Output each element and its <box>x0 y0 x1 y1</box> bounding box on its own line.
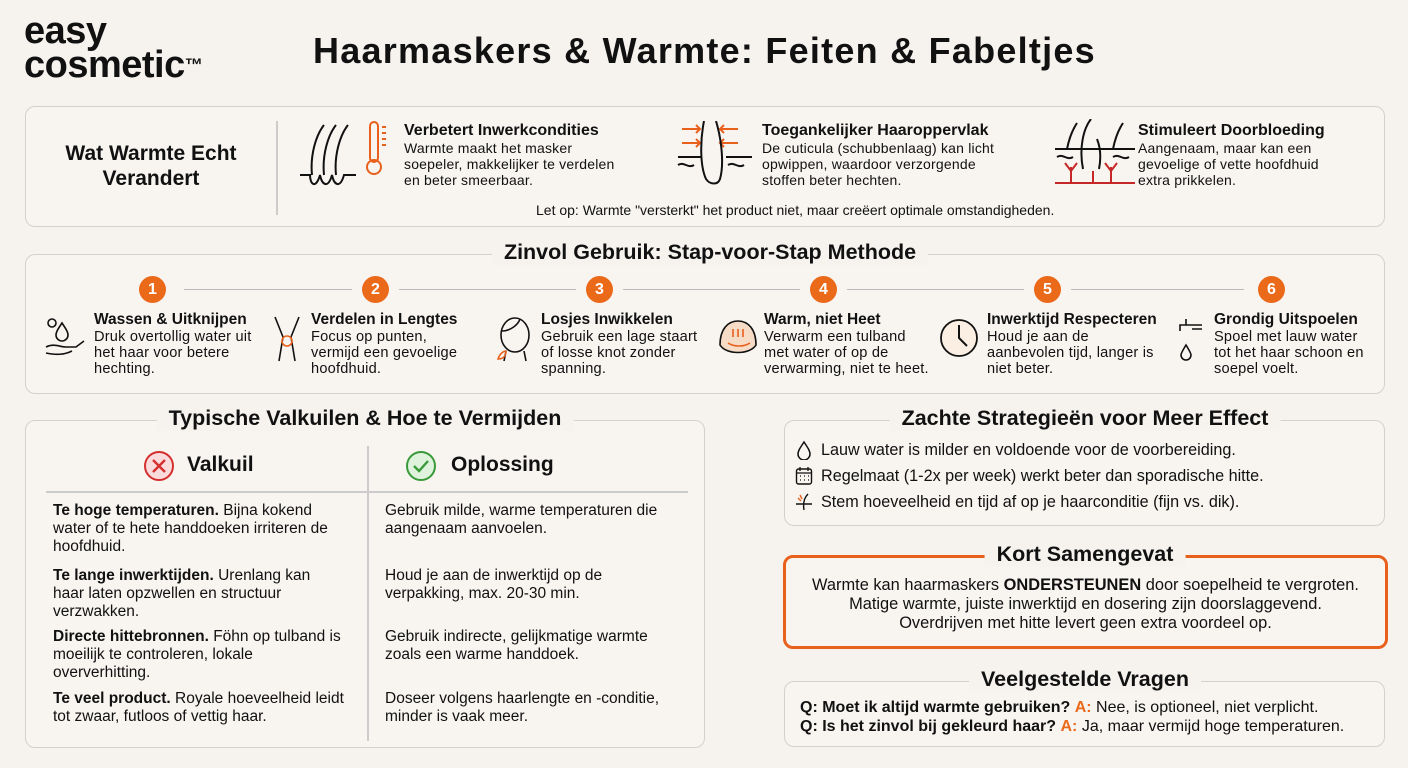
panel: valkuilen: moeilijk te controleren, lokale <box>53 646 253 663</box>
panel: wat warmte echt verandert <box>25 106 1385 227</box>
pitfall rows: water of te hete handdoeken irriteren de <box>53 520 328 537</box>
panel: valkuilen: tot zwaar, futloos of vettig haar. <box>53 708 267 725</box>
step 1: het haar voor betere <box>94 345 229 361</box>
panel: valkuilen: oververhitting. <box>53 664 150 681</box>
pitfall rows: Te hoge temperaturen. Bijna kokend <box>53 502 312 519</box>
panel: valkuilen: verzwakken. <box>53 603 139 620</box>
item 1 <box>404 122 614 188</box>
step 6: soepel voelt. <box>1214 361 1299 377</box>
panel: valkuilen <box>25 420 705 748</box>
summary text: Overdrijven met hitte levert geen extra voordeel op. <box>899 614 1272 632</box>
step 6: tot het haar schoon en <box>1214 345 1364 361</box>
panel: valkuilen: minder is vaak meer. <box>385 708 528 725</box>
step 2: Verdelen in Lengtes <box>311 311 457 328</box>
oplossing header <box>406 451 554 481</box>
heading: zachte strategieen: Zachte Strategieën voor Meer Effect <box>902 406 1268 430</box>
step 2: vermijd een gevoelige <box>311 345 457 361</box>
item 2: Toegankelijker Haaroppervlak <box>762 122 988 139</box>
step 1: hechting. <box>94 361 155 377</box>
valkuil header: Valkuil <box>187 453 254 476</box>
step 4: Verwarm een tulband <box>764 329 906 345</box>
heading: stappen: Zinvol Gebruik: Stap-voor-Stap Methode <box>504 240 916 264</box>
panel: faq <box>784 681 1385 747</box>
panel: valkuilen: Gebruik indirecte, gelijkmatige warmte <box>385 628 648 645</box>
step 5: Houd je aan de <box>987 329 1089 345</box>
step numbers: 6 <box>1267 281 1276 298</box>
step 3 <box>496 311 697 377</box>
heading: Wat Warmte Echt Verandert <box>65 142 237 190</box>
strategy list: Stem hoeveelheid en tijd af op je haarconditie (fijn vs. dik). <box>821 493 1239 511</box>
note: Let op: Warmte "versterkt" het product niet, maar creëert optimale omstandigheden. <box>536 202 1054 218</box>
step numbers: 5 <box>1043 281 1052 298</box>
panel: valkuilen: zoals een warme handdoek. <box>385 646 579 663</box>
panel: valkuilen: haar laten opzwellen en structuur <box>53 585 281 602</box>
icon: hair thermometer <box>300 121 386 186</box>
step 6: Spoel met lauw water <box>1214 329 1358 345</box>
panel: valkuilen: Gebruik milde, warme temperaturen die <box>385 502 657 519</box>
item 2: opwippen, waardoor verzorgende <box>762 156 976 172</box>
panel: valkuilen: Directe hittebronnen. Föhn op tulband is <box>53 628 341 645</box>
faq lines <box>800 699 1344 735</box>
item 3: Stimuleert Doorbloeding <box>1138 122 1325 139</box>
step numbers <box>139 276 1285 303</box>
step 2 <box>274 311 457 377</box>
panel: valkuilen: verpakking, max. 20-30 min. <box>385 585 580 602</box>
step numbers: 1 <box>148 281 157 298</box>
panel: stappen <box>25 254 1385 394</box>
panel: valkuilen: Doseer volgens haarlengte en -conditie, <box>385 690 659 707</box>
valkuil header <box>144 451 254 481</box>
step 4: verwarming, niet te heet. <box>764 361 929 377</box>
step 4: Warm, niet Heet <box>764 311 881 328</box>
item 3 <box>1138 122 1325 188</box>
summary text: Matige warmte, juiste inwerktijd en dosering zijn doorslaggevend. <box>849 595 1322 613</box>
item 1: Warmte maakt het masker <box>404 140 572 156</box>
strategy list <box>821 441 1264 511</box>
strategy list: Regelmaat (1-2x per week) werkt beter dan sporadische hitte. <box>821 467 1264 485</box>
step numbers: 4 <box>819 281 828 298</box>
item 3: Aangenaam, maar kan een <box>1138 140 1312 156</box>
title: Haarmaskers & Warmte: Feiten & Fabeltjes <box>313 30 1096 71</box>
icon: cuticle arrows <box>678 121 752 184</box>
item 2: stoffen beter hechten. <box>762 172 902 188</box>
panel: valkuilen: aangenaam aanvoelen. <box>385 520 547 537</box>
item 2 <box>762 122 994 188</box>
panel: valkuilen: Houd je aan de inwerktijd op de <box>385 567 602 584</box>
item 3: gevoelige of vette hoofdhuid <box>1138 156 1319 172</box>
step 6: Grondig Uitspoelen <box>1214 311 1358 328</box>
oplossing header: Oplossing <box>451 453 554 476</box>
step 3: spanning. <box>541 361 606 377</box>
heading: kort samengevat: Kort Samengevat <box>997 542 1173 566</box>
step 1 <box>46 311 252 377</box>
pitfall rows: hoofdhuid. <box>53 538 125 555</box>
item 2: De cuticula (schubbenlaag) kan licht <box>762 140 994 156</box>
step 3: Losjes Inwikkelen <box>541 311 673 328</box>
item 3: extra prikkelen. <box>1138 172 1236 188</box>
panel: valkuilen: Te lange inwerktijden. Urenlang kan <box>53 567 310 584</box>
icon: drop <box>797 440 811 460</box>
strategy list: Lauw water is milder en voldoende voor de voorbereiding. <box>821 441 1236 459</box>
step numbers: 2 <box>371 281 380 298</box>
step 4 <box>719 311 929 377</box>
panel: kort samengevat <box>783 555 1388 649</box>
icon: calendar <box>796 467 812 485</box>
step connector lines <box>184 289 1244 290</box>
step 5: aanbevolen tijd, langer is <box>987 345 1154 361</box>
logo <box>24 10 202 86</box>
step 6 <box>1179 311 1364 377</box>
faq lines: Q: Moet ik altijd warmte gebruiken? A: Nee, is optioneel, niet verplicht. <box>800 699 1318 716</box>
item 1: soepeler, makkelijker te verdelen <box>404 156 614 172</box>
item 1: en beter smeerbaar. <box>404 172 533 188</box>
step 5: niet beter. <box>987 361 1053 377</box>
step 3: Gebruik een lage staart <box>541 329 697 345</box>
pitfall rows <box>53 502 328 555</box>
summary text <box>812 576 1359 632</box>
faq lines: Q: Is het zinvol bij gekleurd haar? A: Ja, maar vermijd hoge temperaturen. <box>800 718 1344 735</box>
icon: scalp blood <box>1055 119 1135 184</box>
summary text: Warmte kan haarmaskers ONDERSTEUNEN door soepelheid te vergroten. <box>812 576 1359 594</box>
heading: valkuilen: Typische Valkuilen & Hoe te Vermijden <box>169 406 561 430</box>
step numbers: 3 <box>595 281 604 298</box>
step 1: Wassen & Uitknijpen <box>94 311 247 328</box>
heading: faq: Veelgestelde Vragen <box>981 667 1189 691</box>
item 1: Verbetert Inwerkcondities <box>404 122 599 139</box>
step 4: met water of op de <box>764 345 888 361</box>
step 2: Focus op punten, <box>311 329 427 345</box>
panel: zachte strategieen <box>784 420 1385 526</box>
panel: valkuilen: Te veel product. Royale hoeveelheid leidt <box>53 690 344 707</box>
step 1: Druk overtollig water uit <box>94 329 251 345</box>
logo: easy <box>24 10 107 52</box>
step 2: hoofdhuid. <box>311 361 381 377</box>
step 5 <box>940 311 1157 377</box>
step 3: of losse knot zonder <box>541 345 676 361</box>
icon: hair strand <box>796 494 812 510</box>
logo: cosmetic™ <box>24 44 202 86</box>
step 5: Inwerktijd Respecteren <box>987 311 1157 328</box>
